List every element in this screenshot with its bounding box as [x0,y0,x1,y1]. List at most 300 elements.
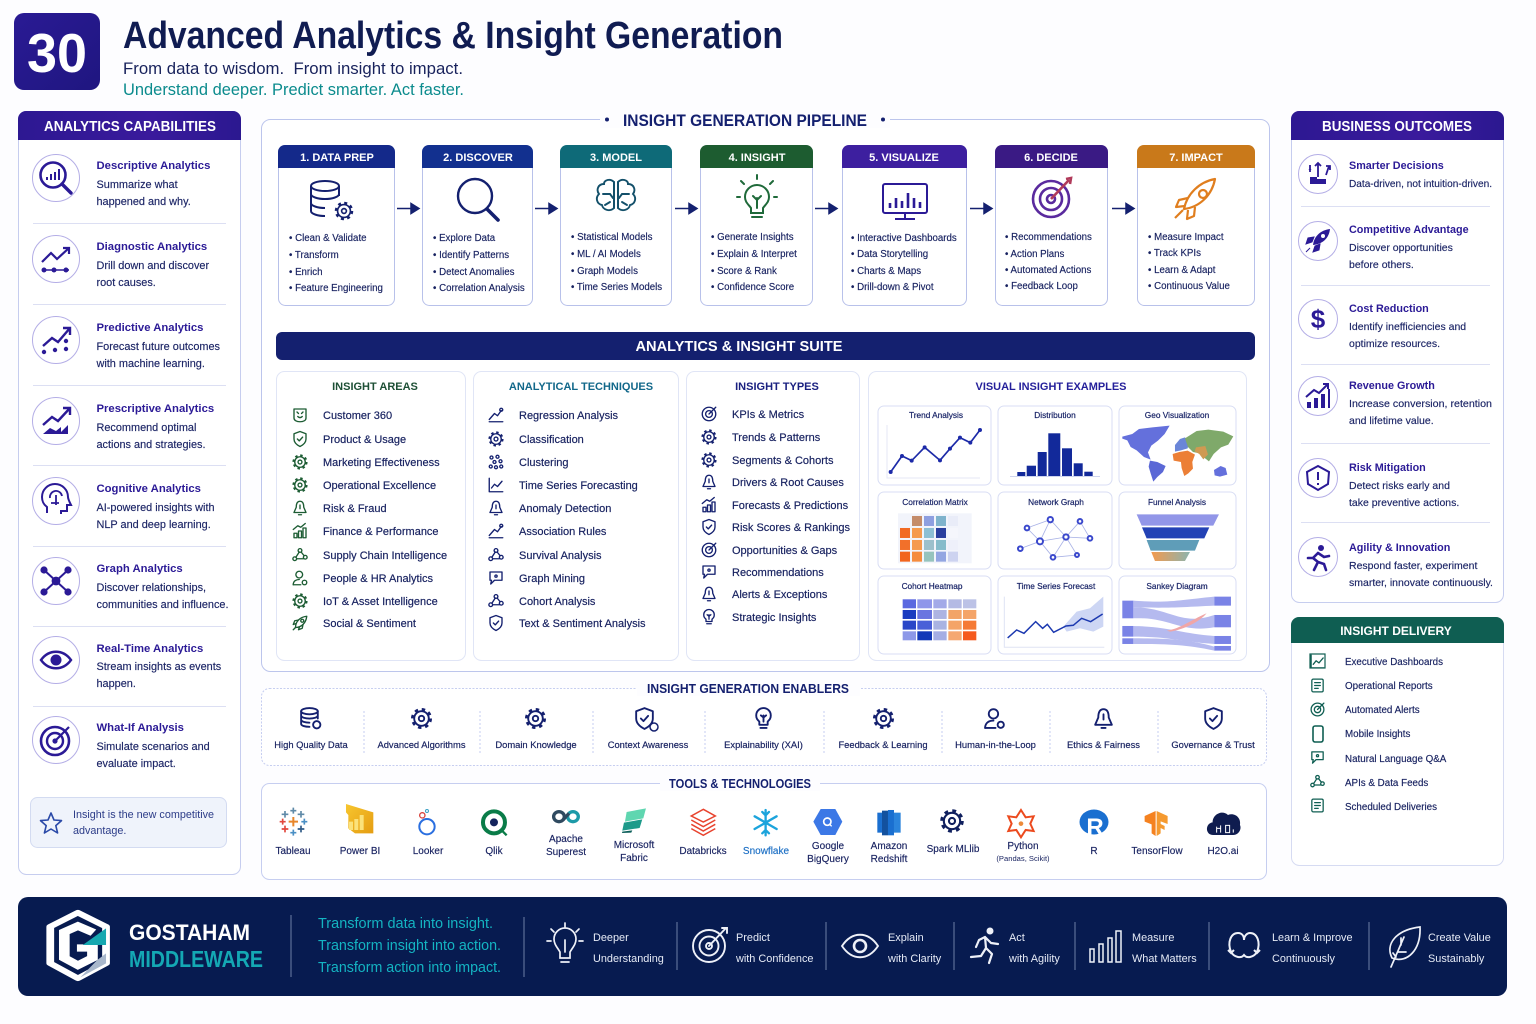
capability: prescriptive analytics: actions and strategies. [96,439,205,451]
panel: visual insight examples [868,372,1246,660]
outcome: smarter decisions [1298,154,1492,194]
enabler: context awareness: Context Awareness [608,739,689,750]
value: explain with clarity: with Clarity [887,953,942,965]
item: survival [489,549,602,562]
panel header: ANALYTICS CAPABILITIES [44,119,216,135]
logo: r [1080,810,1108,857]
logo: r: R [1086,814,1104,841]
logo: microsoft fabric [614,808,655,864]
logo: looker: Looker [413,846,444,857]
enabler: explainability: Explainability (XAI) [724,739,803,750]
outcome: revenue growth [1298,376,1492,427]
step card: 6 decide: 6. DECIDE [1024,152,1078,164]
step card: 1 data prep: • Enrich [289,267,323,278]
item: operational excellence: Operational Excellence [323,480,436,492]
value: learn and improve: Learn & Improve [1272,932,1353,944]
capability: what-if analysis [32,716,210,770]
logo: spark mllib [927,811,980,855]
value: deeper understanding: Deeper [593,932,629,944]
logo: power bi [340,804,380,857]
chart: correlation matrix: Correlation Matrix [902,497,969,507]
value: predict with confidence: Predict [736,932,770,944]
item: people hr [293,571,434,585]
step card: 7 impact: • Track KPIs [1148,248,1201,259]
item: forecasts [702,498,849,512]
logo: qlik [483,811,507,857]
transform statements: Transform data into insight. [318,915,493,932]
step card: 2 discover: • Explore Data [433,233,496,244]
value: act with agility [971,928,1060,965]
item: strategic [704,610,817,624]
step card: 7 impact: • Continuous Value [1148,281,1230,292]
delivery: apis data feeds [1311,775,1428,789]
value: deeper understanding [547,923,664,965]
transform statements: Transform insight into action. [318,937,501,954]
chart: sankey diagram [1119,576,1236,654]
chart: time series forecast [998,576,1112,654]
value: act with agility: Act [1009,932,1025,944]
logo: tableau: Tableau [275,846,311,857]
step card: 4 insight: • Score & Rank [711,266,777,277]
capability: graph analytics: Discover relationships, [96,582,206,594]
delivery header [1291,617,1504,643]
enabler: advanced algorithms: Advanced Algorithms [377,739,466,750]
chart: sankey diagram: Sankey Diagram [1146,581,1208,591]
panel: analytical techniques [474,372,678,660]
outcome: smarter decisions: Smarter Decisions [1349,160,1444,172]
outcome: cost reduction [1298,300,1466,350]
capability: diagnostic analytics: Diagnostic Analytics [96,241,207,253]
item: trends: Trends & Patterns [732,432,821,444]
panel: analytics capabilities [18,111,241,874]
capability: descriptive analytics: Descriptive Analytics [96,160,210,172]
item: association: Association Rules [519,526,607,538]
item: opportunities [702,543,838,557]
item: time series [489,478,638,492]
step card: 6 decide: • Action Plans [1005,249,1065,260]
logo: snowflake: Snowflake [743,846,790,857]
brand name [129,920,263,972]
logo: looker [413,809,444,857]
value: create value sustainably [1390,927,1491,967]
enabler: human in the loop [955,709,1036,750]
step card: 2 discover [422,145,533,306]
panel: insight generation enablers [262,680,1266,766]
item: segments [703,454,834,467]
outcome: cost reduction: optimize resources. [1349,338,1440,350]
header [14,13,783,99]
panel: business outcomes [1291,111,1504,602]
logo: amazon redshift: Redshift [871,854,908,865]
transform statements: Transform action into impact. [318,959,501,976]
value: explain with clarity [842,932,942,965]
step card: 2 discover: • Detect Anomalies [433,267,515,278]
logo: h2o.ai: H2O.ai [1207,846,1239,857]
delivery: mobile insights: Mobile Insights [1345,729,1410,740]
logo: tensorflow: TensorFlow [1131,846,1183,857]
item: cohort: Cohort Analysis [519,596,596,608]
step card: 7 impact: 7. IMPACT [1169,152,1223,164]
arrow [675,204,697,214]
capability: prescriptive analytics: Prescriptive Analytics [96,403,214,415]
item: cohort [489,595,596,608]
delivery: scheduled deliveries [1312,799,1437,813]
chart: funnel analysis: Funnel Analysis [1148,497,1206,507]
chart: cohort heatmap: Cohort Heatmap [902,581,963,591]
step card: 1 data prep: 1. DATA PREP [300,152,374,164]
enabler: governance trust [1171,708,1255,750]
item: clustering: Clustering [519,457,569,469]
item: forecasts: Forecasts & Predictions [732,500,849,512]
enabler: explainability [724,708,803,750]
item: opportunities: Opportunities & Gaps [732,545,838,557]
transform statements [318,915,501,976]
capability: predictive analytics: Predictive Analytics [96,322,203,334]
value: create value sustainably: Create Value [1428,932,1491,944]
brand name: GOSTAHAM [129,920,250,945]
enabler: ethics fairness: Ethics & Fairness [1067,739,1140,750]
title: Advanced Analytics & Insight Generation [123,15,783,57]
step card: 3 model: 3. MODEL [590,152,642,164]
item: finance performance: Finance & Performance [323,526,439,538]
step card: 1 data prep: • Transform [289,250,339,261]
number badge: 30 [27,22,87,84]
outcome: cost reduction: Cost Reduction [1349,303,1429,315]
value: act with agility: with Agility [1008,953,1060,965]
panel: insight types [686,372,860,660]
dividers [291,915,1369,977]
delivery: natural language q&a [1312,752,1447,765]
step card: 6 decide: • Recommendations [1005,232,1092,243]
subtitle: From data to wisdom. From insight to impact. [123,60,463,78]
enabler: ethics fairness [1067,709,1140,750]
item: risk scores: Risk Scores & Rankings [732,522,850,534]
item: classification: Classification [519,434,584,446]
types heading: INSIGHT TYPES [735,381,819,393]
arrow [815,204,837,214]
enablers heading: INSIGHT GENERATION ENABLERS [647,682,849,696]
chart: geo visualization: Geo Visualization [1145,410,1210,420]
chart: time series forecast: Time Series Forecast [1017,581,1096,591]
capability: cognitive analytics: NLP and deep learning. [96,519,211,531]
item: alerts: Alerts & Exceptions [732,589,828,601]
step card: 1 data prep: • Clean & Validate [289,233,367,244]
arrow [970,204,992,214]
brand name: MIDDLEWARE [129,946,263,972]
outcome: cost reduction: Identify inefficiencies and [1349,321,1466,333]
capability: real-time analytics: happen. [96,678,136,690]
enabler: feedback learning: Feedback & Learning [838,739,928,750]
chart: trend analysis [878,406,991,485]
delivery: automated alerts [1311,703,1420,716]
panel: insight generation pipeline [262,112,1270,672]
delivery header: INSIGHT DELIVERY [1340,624,1452,638]
chart: distribution [998,406,1112,485]
item: regression: Regression Analysis [519,410,619,422]
outcome: risk mitigation: Detect risks early and [1349,480,1450,492]
item: marketing effectiveness: Marketing Effectiveness [323,457,440,469]
outcome: agility and innovation: smarter, innovate continuously. [1349,577,1493,589]
logo: google bigquery [807,809,849,865]
chart: trend analysis: Trend Analysis [909,410,963,420]
step card: 4 insight: • Explain & Interpret [711,249,797,260]
chart: network graph: Network Graph [1028,497,1084,507]
step card: 4 insight: • Confidence Score [711,282,794,293]
footer banner [18,897,1507,996]
step card: 2 discover: 2. DISCOVER [443,152,513,164]
callout: advantage. [73,825,126,837]
step card: 5 visualize [842,145,967,306]
capability: diagnostic analytics: root causes. [96,277,156,289]
step card: 5 visualize: • Drill-down & Pivot [851,282,934,293]
item: recommendations [703,566,824,579]
logo: python: (Pandas, Scikit) [996,854,1050,863]
item: risk fraud: Risk & Fraud [323,503,387,515]
capability: descriptive analytics: happened and why. [96,196,191,208]
delivery: automated alerts: Automated Alerts [1345,705,1420,716]
capability: what-if analysis: Simulate scenarios and [96,741,210,753]
logo: microsoft fabric: Microsoft [614,840,655,851]
step card: 1 data prep: • Feature Engineering [289,283,383,294]
value: create value sustainably: Sustainably [1428,953,1485,965]
capability: graph analytics: Graph Analytics [96,563,183,575]
chart: cohort heatmap [878,576,991,654]
callout: Insight is the new competitive [73,809,214,821]
enabler: domain knowledge [495,710,577,750]
item: text sentiment: Text & Sentiment Analysis [519,618,646,630]
logo: snowflake [743,810,790,857]
item: product usage [294,432,406,446]
tools heading: TOOLS & TECHNOLOGIES [669,777,811,791]
outcome: revenue growth: and lifetime value. [1349,415,1434,427]
logo: apache superset: Superest [546,847,586,858]
item: graph mining [490,572,585,585]
step card: 3 model: • Statistical Models [571,232,653,243]
enabler: governance trust: Governance & Trust [1171,739,1255,750]
item: strategic: Strategic Insights [732,612,817,624]
logo: google bigquery: Google [812,841,845,852]
enabler: high quality data [274,708,349,750]
step card: 3 model: • Time Series Models [571,282,662,293]
capability: real-time analytics [32,636,222,690]
visual heading: VISUAL INSIGHT EXAMPLES [976,381,1126,393]
step card: 4 insight [700,145,813,306]
step card: 5 visualize: • Charts & Maps [851,266,921,277]
outcome: agility and innovation: Agility & Innovation [1349,542,1450,554]
enabler: context awareness [608,708,689,750]
outcome: revenue growth: Increase conversion, retention [1349,398,1492,410]
step card: 4 insight: • Generate Insights [711,232,794,243]
dividers [1301,206,1490,522]
outcomes header [1291,111,1504,140]
capability: predictive analytics: with machine learning. [96,358,205,370]
item: anomaly: Anomaly Detection [519,503,611,515]
panel: insight areas [276,372,466,660]
logo: apache superset [546,812,586,858]
item: customer 360: Customer 360 [323,410,392,422]
enabler: high quality data: High Quality Data [274,739,349,750]
step card: 3 model: • Graph Models [571,266,638,277]
capability: cognitive analytics [32,478,215,531]
step card: 5 visualize: • Interactive Dashboards [851,233,957,244]
tagline: Understand deeper. Predict smarter. Act faster. [123,81,464,99]
capability: descriptive analytics: Summarize what [96,179,178,191]
logo: r: R [1090,846,1098,857]
delivery: scheduled deliveries: Scheduled Deliveries [1345,802,1437,813]
enabler: feedback learning [838,710,928,750]
capability: prescriptive analytics [32,398,214,451]
step card: 1 data prep [278,145,395,306]
step card: 5 visualize: 5. VISUALIZE [869,152,939,164]
insight areas heading: INSIGHT AREAS [332,381,418,393]
item: survival: Survival Analysis [519,550,602,562]
item: kpis: KPIs & Metrics [732,409,805,421]
suite banner: ANALYTICS & INSIGHT SUITE [636,338,842,355]
chart: funnel analysis [1119,492,1236,569]
item: clustering [489,455,569,469]
item: customer 360 [294,409,392,422]
enabler: advanced algorithms [377,710,466,750]
logo: microsoft fabric: Fabric [620,853,648,864]
outcome: competitive advantage [1298,222,1469,271]
step card: 3 model: • ML / AI Models [571,249,641,260]
callout [30,798,226,848]
item: iot asset: IoT & Asset Intelligence [323,596,438,608]
logo: power bi: Power BI [340,846,380,857]
outcome: revenue growth: Revenue Growth [1349,380,1435,392]
outcome: competitive advantage: Competitive Advantage [1349,224,1469,236]
item: text sentiment [490,616,646,630]
outcome: competitive advantage: Discover opportunities [1349,242,1453,254]
outcome: agility and innovation [1298,538,1493,589]
item: kpis [702,407,805,421]
arrow [535,204,557,214]
panel: insight delivery [1291,617,1504,866]
item: social sentiment: Social & Sentiment [323,618,416,630]
item: time series: Time Series Forecasting [519,480,638,492]
delivery: operational reports [1312,679,1433,692]
item: supply chain: Supply Chain Intelligence [323,550,447,562]
item: regression [489,408,619,422]
chart: network graph [998,492,1112,569]
step card: 4 insight: 4. INSIGHT [729,152,786,164]
logo: tensorflow [1131,811,1183,857]
item: drivers [703,475,844,489]
delivery: mobile insights [1313,726,1410,742]
enabler: human in the loop: Human-in-the-Loop [955,739,1036,750]
logo: gostaham mark [50,913,106,978]
item: trends [703,431,821,444]
value: measure what matters: What Matters [1132,953,1197,965]
dividers [33,224,226,706]
logo: google bigquery: BigQuery [807,854,849,865]
logo: python: Python [1007,841,1039,852]
capability: what-if analysis: evaluate impact. [96,758,176,770]
dividers [364,711,1158,754]
step card: 2 discover: • Identify Patterns [433,250,509,261]
step card: 7 impact: • Learn & Adapt [1148,265,1216,276]
item: social sentiment [293,616,416,630]
capability: graph analytics: communities and influence. [96,599,228,611]
techniques heading: ANALYTICAL TECHNIQUES [509,381,653,393]
logo: databricks: Databricks [679,846,727,857]
delivery: natural language q&a: Natural Language Q&A [1345,754,1447,765]
logo: spark mllib: Spark MLlib [927,844,980,855]
number badge [14,13,100,90]
arrow [1112,204,1134,214]
logo: qlik: Qlik [485,846,504,857]
value: predict with confidence: with Confidence [735,953,814,965]
arrow [397,204,419,214]
item: anomaly [490,501,611,515]
item: drivers: Drivers & Root Causes [732,477,844,489]
item: recommendations: Recommendations [732,567,824,579]
capability: cognitive analytics: Cognitive Analytics [96,483,201,495]
item: classification [490,433,584,446]
capability: descriptive analytics [32,154,210,208]
chart: correlation matrix [878,492,991,569]
outcome: risk mitigation: take preventive actions. [1349,497,1459,509]
pipeline heading: INSIGHT GENERATION PIPELINE [623,112,867,130]
step card: 5 visualize: • Data Storytelling [851,249,928,260]
enabler: domain knowledge: Domain Knowledge [495,739,577,750]
capability: real-time analytics: Real-Time Analytics [96,643,203,655]
item: graph mining: Graph Mining [519,573,585,585]
capability: predictive analytics: Forecast future outcomes [96,341,221,353]
capability: graph analytics [32,558,228,611]
value: explain with clarity: Explain [888,932,924,944]
logo: databricks [679,809,727,857]
value: deeper understanding: Understanding [593,953,664,965]
panel header [18,111,241,140]
outcomes header: BUSINESS OUTCOMES [1322,119,1472,135]
item: people hr: People & HR Analytics [323,573,434,585]
item: segments: Segments & Cohorts [732,455,834,467]
step card: 6 decide: • Feedback Loop [1005,281,1078,292]
capability: what-if analysis: What-If Analysis [96,722,184,734]
capability: diagnostic analytics: Drill down and discover [96,260,209,272]
delivery: executive dashboards: Executive Dashboards [1345,657,1443,668]
step card: 3 model [560,145,672,306]
outcome: cost reduction: $ [1311,304,1326,334]
step card: 7 impact [1137,145,1255,306]
outcome: competitive advantage: before others. [1349,259,1414,271]
logo: python [996,810,1050,863]
step card: 6 decide: • Automated Actions [1005,265,1091,276]
value: learn and improve [1228,932,1353,965]
capability: prescriptive analytics: Recommend optimal [96,422,196,434]
item: product usage: Product & Usage [323,434,406,446]
logo: amazon redshift: Amazon [871,841,907,852]
item: alerts [703,587,828,601]
chart: geo visualization [1119,406,1236,485]
logo: h2o.ai [1207,813,1241,857]
step card: 2 discover: • Correlation Analysis [433,283,525,294]
capability: diagnostic analytics [32,236,209,289]
chart: distribution: Distribution [1034,410,1076,420]
capability: real-time analytics: Stream insights as events [96,661,222,673]
logo: tableau [275,808,311,857]
outcome: risk mitigation [1298,458,1459,509]
capability: predictive analytics [32,316,221,370]
delivery: apis data feeds: APIs & Data Feeds [1345,778,1428,789]
step card: 6 decide [995,145,1108,306]
value: predict with confidence [693,928,814,965]
value: measure what matters: Measure [1132,932,1174,944]
panel: tools and technologies [262,775,1266,880]
logo: amazon redshift [871,810,908,865]
step card: 7 impact: • Measure Impact [1148,232,1224,243]
